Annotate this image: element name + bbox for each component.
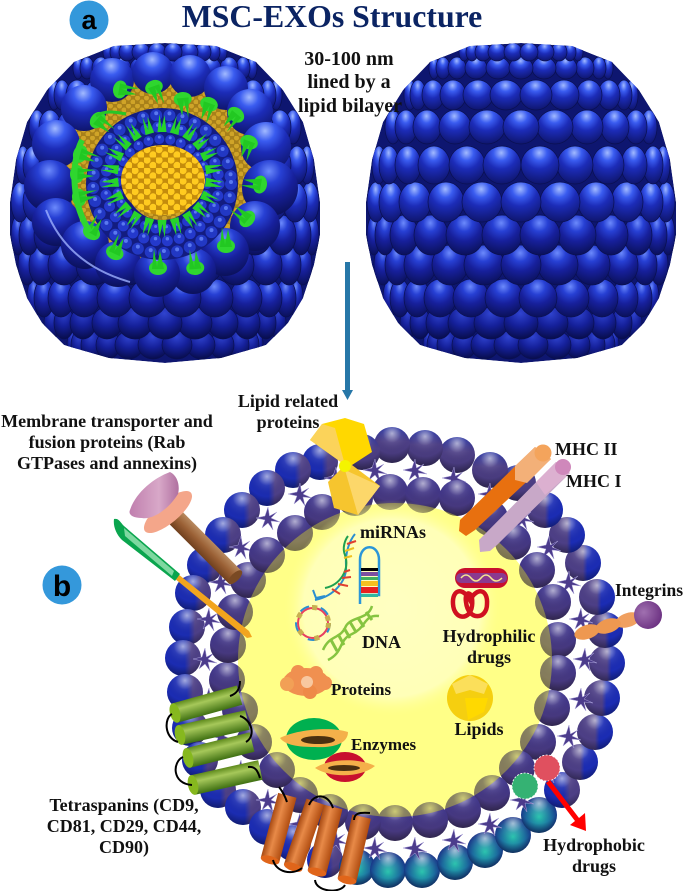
label: membrane transporter: fusion proteins (Rab xyxy=(29,432,185,453)
badge a: a xyxy=(81,5,97,35)
label: hydrophobic drugs: drugs xyxy=(572,856,616,876)
label: enzymes: Enzymes xyxy=(351,735,417,754)
label: MHC I: MHC I xyxy=(566,471,622,491)
label: membrane transporter: Membrane transporter and xyxy=(1,411,213,431)
badge b: b xyxy=(53,570,71,603)
label: lipids: Lipids xyxy=(454,719,504,739)
outer leaflet xyxy=(165,427,625,888)
label: MHC II: MHC II xyxy=(555,439,618,459)
label: membrane transporter: GTPases and annexins) xyxy=(17,453,197,474)
badge a xyxy=(70,0,108,40)
yellow core xyxy=(121,145,205,215)
size caption: 30-100 nm xyxy=(304,48,394,70)
exosome closed sphere xyxy=(366,43,676,363)
label: lipid related proteins: Lipid related xyxy=(238,391,338,411)
tetraspanins green cylinders xyxy=(167,681,263,796)
label: proteins: Proteins xyxy=(331,680,392,699)
label: lipid related proteins xyxy=(238,391,338,432)
outer green proteins xyxy=(70,78,268,276)
inner green proteins xyxy=(100,114,224,238)
exosome cutaway sphere xyxy=(10,43,320,363)
MHC I xyxy=(479,459,571,552)
label: membrane transporter xyxy=(1,411,213,474)
label: tetraspanins: Tetraspanins (CD9, xyxy=(49,795,199,816)
lipid related protein xyxy=(310,418,380,515)
icon: hydrophilic drugs xyxy=(453,568,508,617)
size caption: lined by a xyxy=(307,71,391,93)
size caption xyxy=(298,48,402,117)
label: DNA: DNA xyxy=(362,632,401,652)
arrow from a to b xyxy=(342,262,353,400)
icon: lipid droplet xyxy=(447,675,493,721)
size caption: lipid bilayer xyxy=(298,95,402,117)
label: hydrophilic drugs xyxy=(443,626,535,667)
label: hydrophobic drugs xyxy=(543,835,645,876)
membrane transporter funnel xyxy=(130,472,244,586)
hydrophobic drug spheres and arrow xyxy=(512,755,586,831)
label: hydrophilic drugs: Hydrophilic xyxy=(443,626,535,646)
tetraspanins orange cylinders xyxy=(260,787,371,891)
inner leaflet xyxy=(209,474,576,841)
title: MSC-EXOs Structure xyxy=(182,0,482,34)
label: miRNAs: miRNAs xyxy=(360,522,426,542)
large rim balls xyxy=(32,52,291,172)
icon: plasmid xyxy=(296,606,330,640)
MHC II xyxy=(459,444,552,536)
icon: enzymes xyxy=(280,718,375,782)
icon: miRNA hairpin xyxy=(360,547,379,604)
label: hydrophobic drugs: Hydrophobic xyxy=(543,835,645,855)
label: lipid related proteins: proteins xyxy=(257,412,319,432)
lipid bilayer ring xyxy=(165,427,625,888)
integrin xyxy=(572,601,662,643)
label: tetraspanins: CD90) xyxy=(99,837,149,858)
icon: protein blob xyxy=(280,665,332,699)
icon: DNA xyxy=(323,606,379,660)
shelf highlight xyxy=(46,210,130,282)
label: integrins: Integrins xyxy=(615,580,683,600)
yellow lumen xyxy=(238,500,552,817)
label: tetraspanins: CD81, CD29, CD44, xyxy=(47,816,201,836)
label: tetraspanins xyxy=(47,795,201,858)
badge b xyxy=(42,566,82,604)
opening showing gold lining xyxy=(66,66,278,274)
lipid tails xyxy=(193,459,597,860)
label: hydrophilic drugs: drugs xyxy=(467,647,511,667)
icon: RNA helix xyxy=(313,534,356,600)
inner vesicle ring of blue lipids xyxy=(93,113,231,253)
membrane fusion rod xyxy=(114,519,252,638)
